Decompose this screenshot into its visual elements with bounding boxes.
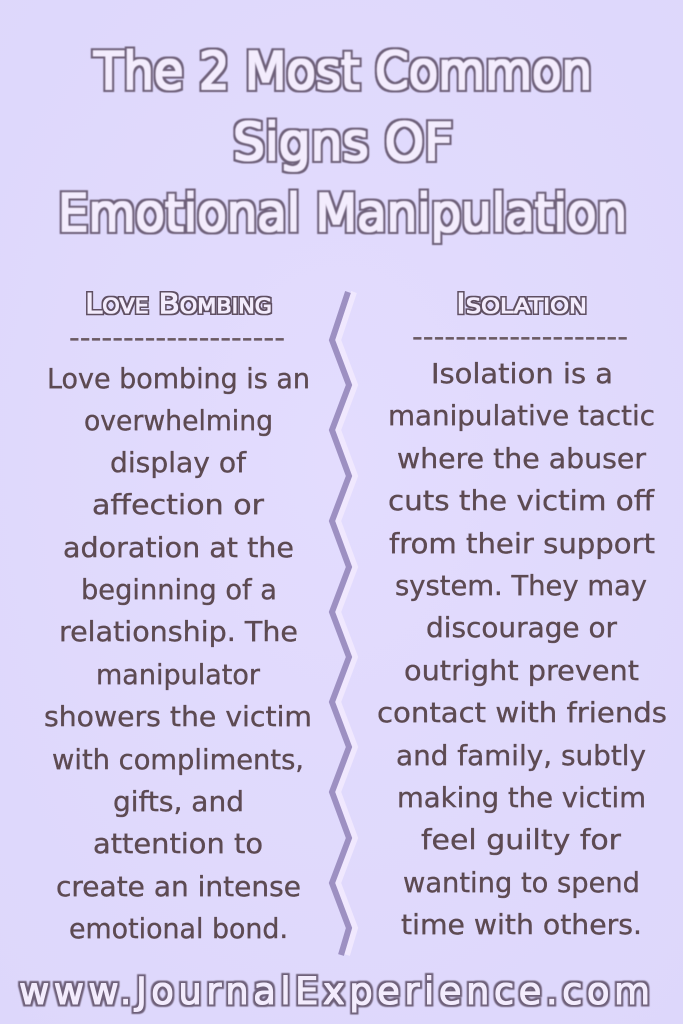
text block: isolation description: and family, subtly — [396, 740, 646, 772]
text block: isolation description: time with others. — [401, 909, 642, 941]
title: Signs OF — [233, 113, 453, 173]
text block: isolation description: cuts the victim off — [388, 485, 655, 517]
text block: love bombing description: adoration at the — [63, 532, 294, 564]
text block: love bombing description: showers the victim — [44, 701, 312, 733]
text block: love bombing description — [44, 363, 312, 945]
text block: love bombing description: affection or — [92, 489, 265, 521]
title — [58, 42, 627, 244]
text block: love bombing description: with compliments, — [52, 744, 304, 776]
text block: love bombing description: create an intense — [56, 871, 301, 903]
text block: isolation description: where the abuser — [397, 443, 647, 475]
text block: love bombing description: Love bombing is an — [47, 363, 310, 395]
dashed separator: isolation: -------------------- — [412, 320, 628, 353]
text block: isolation description: making the victim — [397, 782, 646, 814]
text block: isolation description: system. They may — [395, 570, 647, 602]
text block: love bombing description: gifts, and — [113, 786, 244, 818]
text block: love bombing description: display of — [110, 447, 247, 479]
text block: love bombing description: emotional bond. — [69, 913, 288, 945]
footer website url: www.JournalExperience.com — [19, 970, 650, 1013]
text block: love bombing description: beginning of a — [81, 574, 277, 606]
title: The 2 Most Common — [93, 42, 592, 102]
text block: isolation description: from their support — [389, 528, 655, 560]
text block: isolation description: wanting to spend — [403, 867, 640, 899]
text block: isolation description: outright prevent — [404, 655, 639, 687]
text block: isolation description: Isolation is a — [431, 358, 613, 390]
title: Emotional Manipulation — [58, 184, 627, 244]
text block: love bombing description: overwhelming — [84, 405, 273, 437]
zigzag divider — [332, 292, 355, 955]
text block: love bombing description: manipulator — [96, 659, 261, 691]
heading: love bombing: Love Bombing — [85, 287, 272, 320]
text block: isolation description: discourage or — [426, 612, 618, 644]
text block: love bombing description: relationship. The — [59, 616, 298, 648]
text block: isolation description — [377, 358, 667, 941]
text block: isolation description: contact with friends — [377, 697, 667, 729]
text block: isolation description: feel guilty for — [421, 824, 622, 856]
text block: isolation description: manipulative tactic — [388, 400, 655, 432]
panel: love bombing — [44, 287, 312, 945]
panel: isolation — [377, 287, 667, 941]
text block: love bombing description: attention to — [93, 828, 263, 860]
heading: isolation: Isolation — [456, 287, 587, 320]
dashed separator: love bombing: -------------------- — [69, 321, 285, 354]
